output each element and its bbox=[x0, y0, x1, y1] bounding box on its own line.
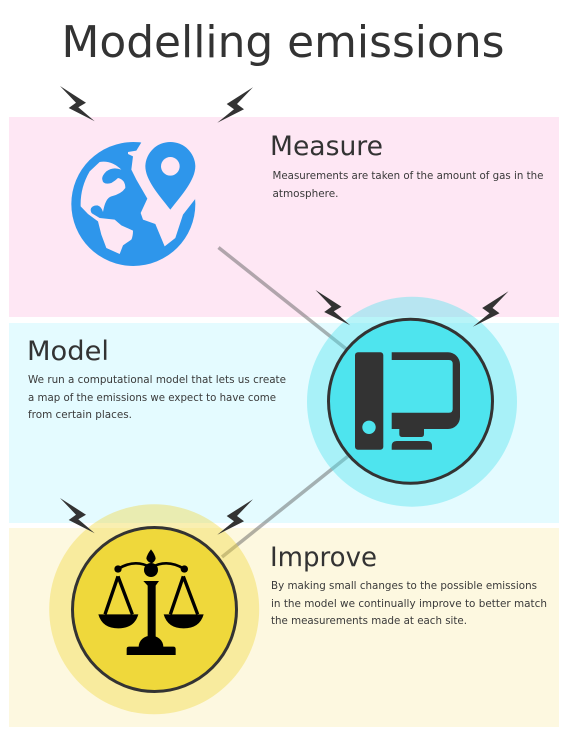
panel: measure bbox=[9, 117, 559, 317]
heading: model: Model bbox=[27, 336, 109, 367]
text block: improve: in the model we continually improve to better match bbox=[271, 597, 547, 610]
text block: model: a map of the emissions we expect to have come bbox=[28, 391, 276, 404]
icon: computer bbox=[355, 352, 460, 450]
model node with computer icon bbox=[307, 297, 517, 507]
text block: improve bbox=[271, 579, 547, 627]
connector: measure to model bbox=[218, 248, 350, 352]
text block: measure: atmosphere. bbox=[272, 187, 338, 200]
text block: improve: the measurements made at each site. bbox=[271, 614, 467, 627]
connector: model to improve bbox=[222, 453, 352, 557]
heading: measure: Measure bbox=[270, 131, 383, 162]
icon: globe with map pin bbox=[71, 138, 201, 266]
text block: measure bbox=[272, 169, 544, 200]
improve node with scales icon bbox=[49, 504, 259, 714]
text block: measure: Measurements are taken of the amount of gas in the bbox=[272, 169, 544, 182]
lightning pair: improve bbox=[60, 498, 253, 535]
text block: model: from certain places. bbox=[28, 408, 132, 421]
lightning pair: model bbox=[316, 290, 508, 327]
text block: improve: By making small changes to the possible emissions bbox=[271, 579, 537, 592]
icon: balance scales bbox=[98, 549, 204, 655]
panel: improve bbox=[9, 528, 559, 727]
heading: improve: Improve bbox=[270, 542, 377, 573]
lightning pair: measure bbox=[60, 86, 253, 123]
title: Modelling emissions bbox=[62, 17, 504, 68]
text block: model bbox=[28, 373, 286, 421]
panel: model bbox=[9, 323, 559, 523]
text block: model: We run a computational model that lets us create bbox=[28, 373, 286, 386]
